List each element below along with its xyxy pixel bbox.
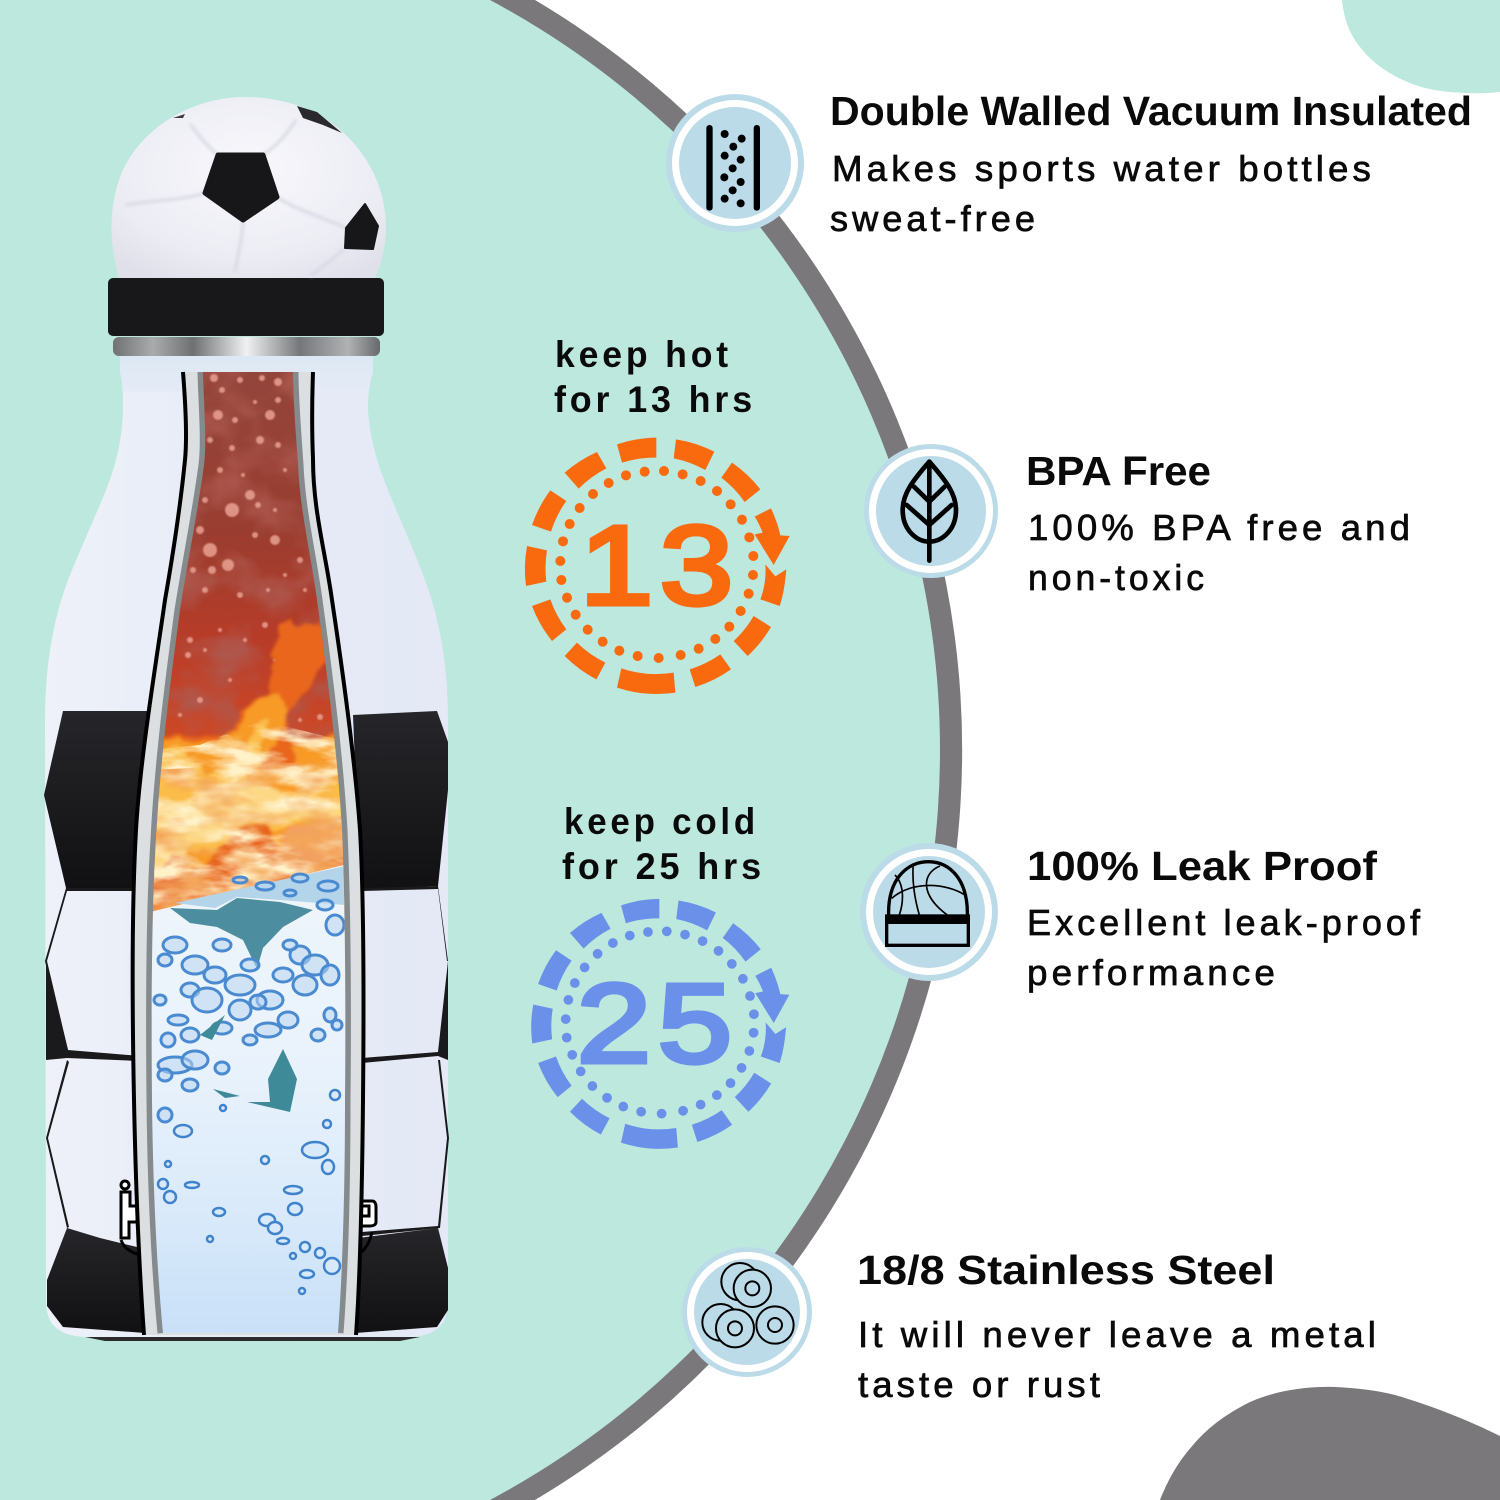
neck collar highlight bbox=[120, 355, 373, 392]
icon: double wall vacuum bbox=[666, 94, 804, 232]
feature: leak proof bbox=[1027, 843, 1424, 993]
bottle interior bbox=[152, 372, 346, 1333]
feature: double walled vacuum insulated: Double Walled Vacuum Insulated bbox=[830, 88, 1472, 134]
keep cold label: for 25 hrs bbox=[562, 846, 765, 887]
bottle base shadow bbox=[85, 1337, 420, 1341]
soccer panels right bbox=[353, 711, 449, 1333]
bottle body bbox=[45, 355, 448, 1340]
wall outline bbox=[133, 372, 364, 1335]
hot bubbles bbox=[178, 374, 323, 722]
logo fragment left bbox=[121, 1181, 140, 1255]
logo fragment right bbox=[358, 1201, 376, 1255]
surface ripple band bbox=[175, 866, 345, 908]
water surface swirl bbox=[170, 898, 313, 969]
feature: double walled vacuum insulated bbox=[830, 88, 1472, 239]
blue 25 hour dial bbox=[531, 899, 789, 1149]
inner wall stripe bbox=[152, 372, 345, 1333]
gray corner blob bbox=[1160, 1387, 1500, 1500]
hot liquid mottling bbox=[167, 372, 334, 738]
feature: BPA free: 100% BPA free and bbox=[1028, 507, 1414, 548]
flame texture bbox=[153, 723, 344, 906]
feature: leak proof: performance bbox=[1027, 952, 1279, 993]
keep hot label: for 13 hrs bbox=[554, 379, 756, 420]
blue 25 hour dial: 25 bbox=[577, 961, 739, 1086]
icon: leaf bbox=[864, 444, 998, 578]
lower bubbles bbox=[158, 1090, 340, 1294]
feature: stainless steel: It will never leave a metal bbox=[858, 1314, 1380, 1355]
keep hot label bbox=[554, 334, 756, 420]
mint circle panel bbox=[0, 0, 940, 1500]
cutaway wall bbox=[133, 372, 364, 1335]
cold water bbox=[150, 864, 348, 1340]
orange 13 hour dial: 13 bbox=[580, 503, 740, 628]
silver ring bbox=[113, 337, 380, 356]
feature: double walled vacuum insulated: sweat-free bbox=[830, 198, 1039, 239]
feature: stainless steel bbox=[857, 1247, 1380, 1405]
orange 13 hour dial bbox=[525, 438, 790, 694]
ice fragments bbox=[200, 1015, 297, 1112]
feature: stainless steel: taste or rust bbox=[858, 1364, 1104, 1405]
mint corner blob bbox=[1342, 0, 1500, 93]
icon: basketball lid bbox=[860, 843, 998, 981]
black cap band bbox=[108, 278, 384, 336]
feature: stainless steel: 18/8 Stainless Steel bbox=[857, 1247, 1275, 1293]
flames bbox=[145, 618, 350, 920]
soccer panels left bbox=[44, 711, 152, 1333]
feature: leak proof: 100% Leak Proof bbox=[1027, 843, 1377, 889]
bubble cloud bbox=[154, 874, 344, 1122]
bottle bbox=[44, 97, 449, 1341]
feature: BPA free: BPA Free bbox=[1026, 448, 1211, 494]
feature: leak proof: Excellent leak-proof bbox=[1027, 902, 1424, 943]
hot liquid bbox=[152, 372, 344, 922]
keep hot label: keep hot bbox=[555, 334, 732, 375]
keep cold label: keep cold bbox=[564, 801, 759, 842]
keep cold label bbox=[562, 801, 765, 887]
feature: BPA free: non-toxic bbox=[1028, 557, 1208, 598]
gray arc ring bbox=[0, 0, 962, 1500]
flame deep texture bbox=[153, 760, 343, 912]
feature: double walled vacuum insulated: Makes sports water bottles bbox=[832, 148, 1375, 189]
icon: steel rolls bbox=[682, 1247, 812, 1377]
feature: BPA free bbox=[1026, 448, 1414, 598]
soccer ball cap bbox=[111, 97, 386, 278]
